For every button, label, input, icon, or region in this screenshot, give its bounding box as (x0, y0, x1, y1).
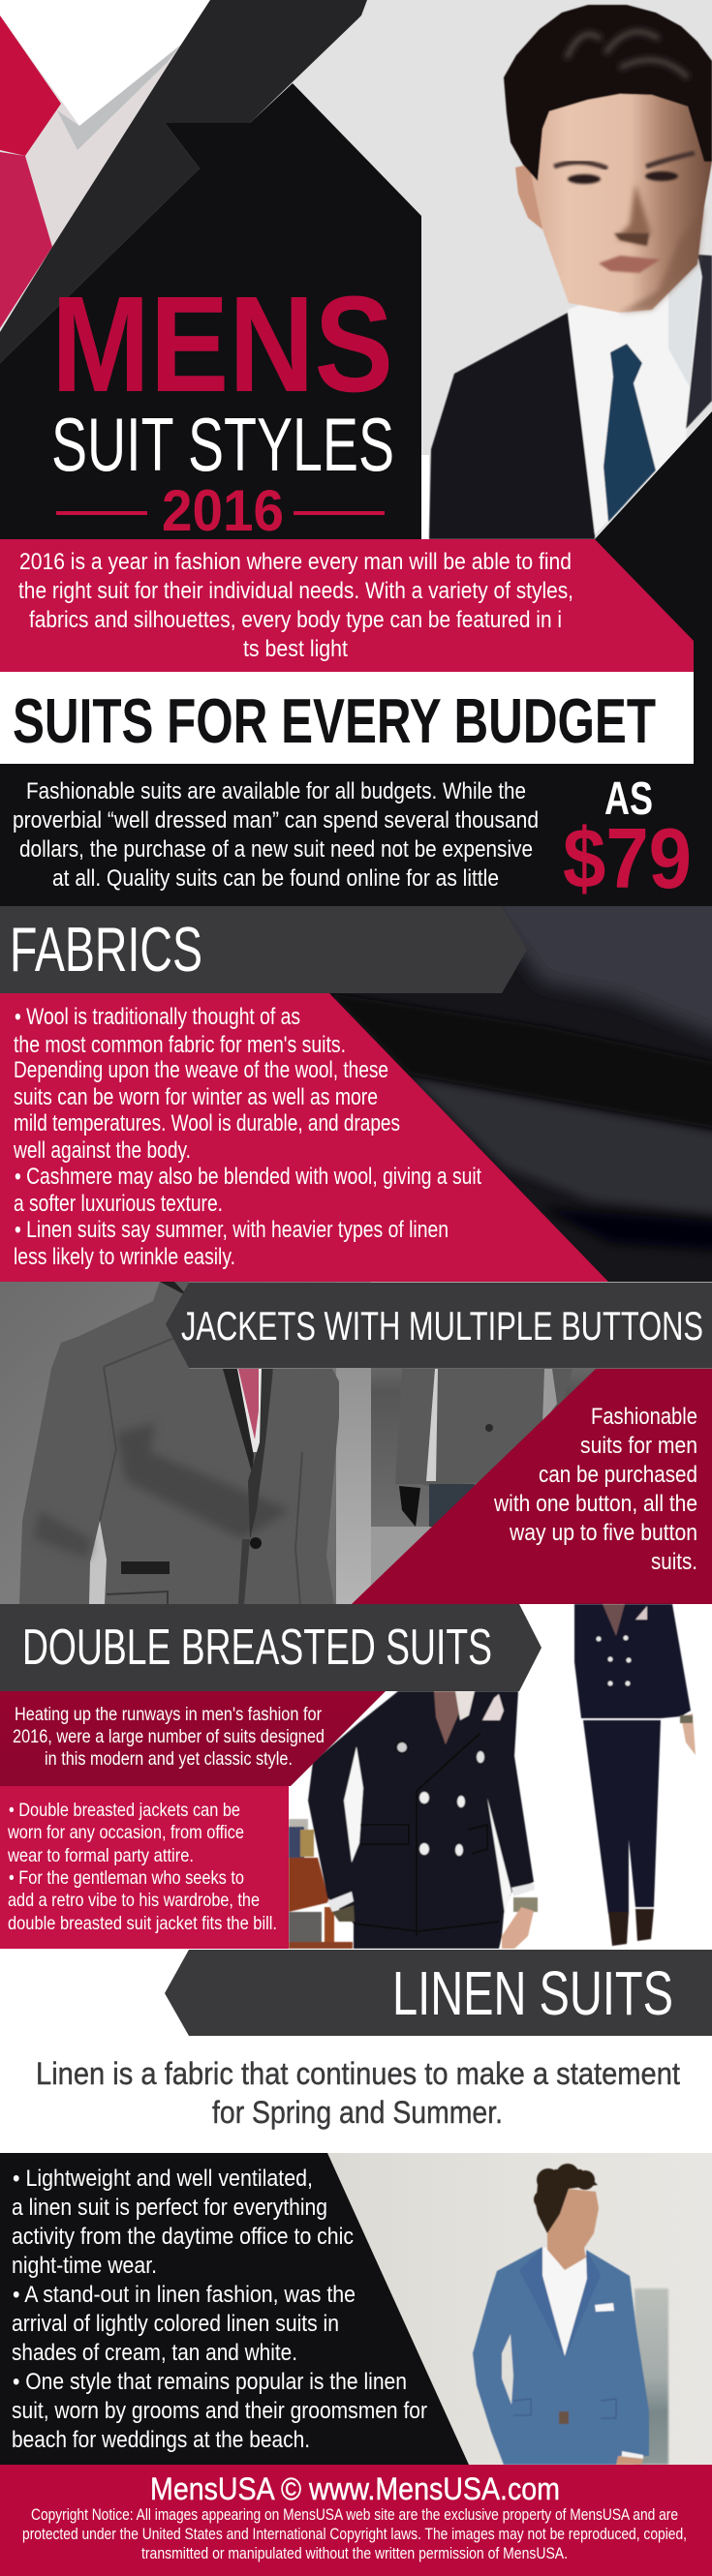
photo: grey jackets (0, 1282, 712, 1604)
photo: man in blue linen suit (327, 2153, 712, 2465)
front jacket (308, 1691, 534, 1949)
text panel: buttons copy: suits for men (580, 1433, 697, 1459)
text panel: linen bullets: activity from the daytime office to chic (12, 2224, 354, 2250)
text panel: linen bullets (0, 2153, 469, 2465)
panel: jackets with multiple buttons (0, 1282, 712, 1604)
text panel: fabrics copy: Depending upon the weave of the wool, these (14, 1057, 388, 1083)
main jacket (19, 1282, 339, 1604)
text block: budget copy: Fashionable suits are available for all budgets. While the (26, 778, 526, 804)
photo: dark fabric (329, 891, 712, 1283)
heading: linen suits (165, 1950, 712, 2036)
text block: intro copy: 2016 is a year in fashion where every man will be able to find (19, 549, 572, 575)
price callout: $79 (563, 810, 692, 906)
text block: intro copy: ts best light (243, 636, 348, 662)
text panel: double breasted bullets (0, 1786, 289, 1949)
text panel: linen bullets: shades of cream, tan and white. (12, 2340, 297, 2366)
heading: jackets with multiple buttons (166, 1283, 712, 1368)
text block: intro copy: fabrics and silhouettes, every body type can be featured in i (29, 607, 562, 633)
text panel: linen bullets: • Lightweight and well ventilated, (13, 2166, 313, 2192)
icon: lapel (0, 0, 367, 363)
text panel: fabrics copy: • Linen suits say summer, with heavier types of linen (15, 1217, 449, 1243)
icon: tie blade (0, 152, 52, 328)
heading: double breasted suits: DOUBLE BREASTED SUITS (22, 1620, 492, 1676)
copyright notice (22, 2505, 687, 2562)
text block: intro copy: the right suit for their individual needs. With a variety of styles, (18, 578, 573, 604)
text panel: double breasted bullets: double breasted suit jacket fits the bill. (8, 1913, 277, 1934)
text panel: linen bullets: night-time wear. (12, 2253, 157, 2279)
curly hair (534, 2164, 598, 2233)
text panel: linen bullets: suit, worn by grooms and their groomsmen for (12, 2398, 427, 2424)
text block: budget copy (13, 778, 539, 892)
pocket square (595, 2303, 614, 2312)
hair (504, 5, 712, 181)
heading: fabrics: FABRICS (10, 914, 202, 985)
panel: fabrics (0, 891, 712, 1283)
text block: budget copy: proverbial “well dressed man” can spend several thousand (13, 807, 539, 833)
footer (0, 2465, 712, 2576)
text panel: double breasted bullets: wear to formal party attire. (7, 1845, 194, 1866)
text block: budget copy: at all. Quality suits can be found online for as little (52, 865, 499, 892)
text panel: buttons copy: suits. (651, 1549, 697, 1575)
text block: linen statement: for Spring and Summer. (212, 2095, 503, 2130)
text panel: fabrics copy: less likely to wrinkle easily. (14, 1244, 235, 1270)
text panel: double breasted bullets: • Double breasted jackets can be (9, 1800, 240, 1821)
header panel: suit graphic and portrait (0, 0, 712, 543)
panel: budget (0, 764, 712, 907)
text panel: linen bullets: • One style that remains popular is the linen (13, 2369, 407, 2395)
text panel: double breasted intro: Heating up the runways in men's fashion for (15, 1704, 322, 1725)
text panel: double breasted intro: 2016, were a large number of suits designed (13, 1726, 325, 1747)
title: MENS: MENS (51, 267, 393, 420)
eyes (568, 174, 601, 184)
photo: portrait of man in dark suit (429, 5, 712, 539)
text panel: fabrics copy: • Wool is traditionally thought of as (15, 1004, 300, 1030)
text panel: double breasted intro: in this modern and yet classic style. (45, 1748, 293, 1770)
text block: intro copy (18, 549, 573, 662)
right black column (581, 539, 712, 907)
eyebrows (554, 162, 607, 168)
text panel: fabrics copy: • Cashmere may also be blended with wool, giving a suit (15, 1164, 481, 1190)
text panel: linen bullets: beach for weddings at the beach. (12, 2427, 310, 2453)
mouth (599, 256, 661, 273)
icon: tie knot (0, 15, 61, 156)
text panel: fabrics copy (0, 993, 608, 1282)
text panel: fabrics copy: well against the body. (13, 1137, 191, 1164)
panel: double breasted suits (0, 1604, 712, 1949)
icon: collar shadow (57, 45, 181, 150)
icon: shirt (25, 45, 203, 247)
nose (616, 184, 651, 244)
icon: collar (0, 0, 210, 126)
shirt (542, 2247, 587, 2356)
text panel: linen bullets: arrival of lightly colored linen suits in (12, 2311, 339, 2337)
jacket buttons (395, 1741, 409, 1754)
ear (515, 165, 542, 229)
text panel: double breasted bullets: worn for any occasion, from office (7, 1822, 244, 1843)
title: year with rules: 2016 (162, 478, 284, 543)
text panel: fabrics copy: mild temperatures. Wool is durable, and drapes (14, 1110, 400, 1136)
icon: bottom corner triangle (595, 411, 712, 539)
panel: intro (0, 539, 694, 672)
text panel: linen bullets: a linen suit is perfect for everything (12, 2195, 327, 2221)
text panel: double breasted intro (0, 1691, 386, 1786)
text block: linen statement (36, 2056, 680, 2130)
face (531, 82, 712, 313)
title: year with rules (56, 478, 385, 543)
text panel: fabrics copy: a softer luxurious texture. (14, 1191, 223, 1217)
text panel: fabrics copy: suits can be worn for winter as well as more (14, 1084, 378, 1110)
price callout (563, 773, 692, 906)
panel: linen suits (0, 1949, 712, 2465)
text panel: buttons copy (352, 1369, 712, 1604)
neck and face (547, 2189, 599, 2270)
text panel: double breasted bullets: • For the gentleman who seeks to (9, 1867, 244, 1889)
heading: double breasted suits (0, 1604, 542, 1691)
text panel: fabrics copy: the most common fabric for men's suits. (14, 1032, 346, 1058)
standing figure (574, 1604, 691, 1718)
ear (542, 2206, 552, 2224)
photo: double breasted suits (289, 1604, 696, 1949)
price callout: AS (604, 773, 653, 825)
footer title: MensUSA © www.MensUSA.com (150, 2471, 560, 2506)
copyright notice: transmitted or manipulated without the written permission of MensUSA. (141, 2544, 568, 2562)
title: SUIT STYLES: SUIT STYLES (51, 402, 394, 487)
text panel: double breasted bullets: add a retro vibe to his wardrobe, the (8, 1890, 260, 1911)
icon: jacket body (0, 83, 421, 539)
heading: fabrics (0, 906, 527, 993)
second jacket (395, 1369, 573, 1486)
text block: budget copy: dollars, the purchase of a new suit need not be expensive (19, 836, 533, 863)
text panel: linen bullets: • A stand-out in linen fashion, was the (13, 2282, 356, 2308)
jacket (473, 2247, 649, 2465)
